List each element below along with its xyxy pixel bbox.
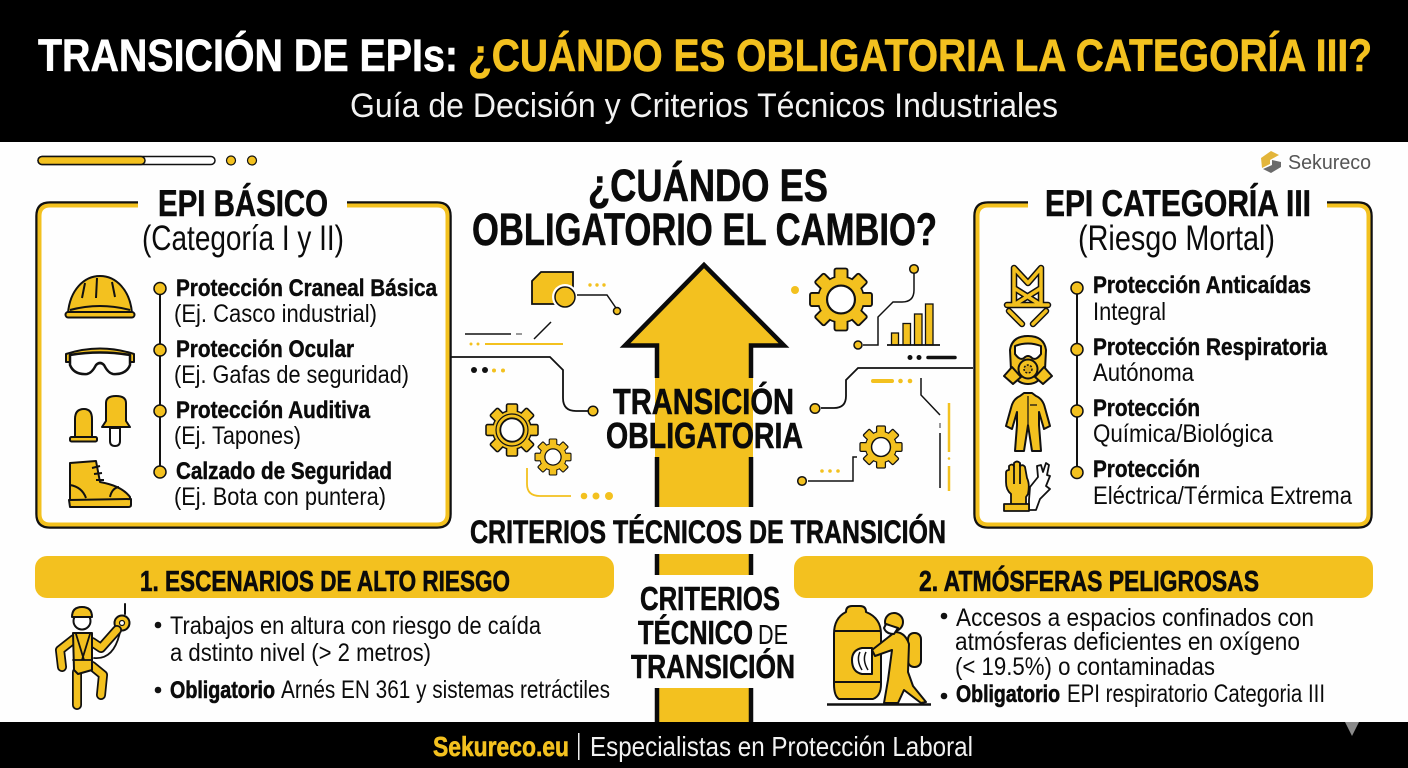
list item 2 [1093,334,1328,387]
list item 2: Protección Respiratoria [1093,334,1328,361]
bullet 1 [941,604,1314,681]
banner [794,556,1373,598]
header band [0,0,1408,142]
list item 1: (Ej. Casco industrial) [174,300,377,328]
list item 3: (Ej. Tapones) [174,422,301,450]
icon: gears left [486,404,571,475]
panel subheading: (Categoría I y II) [142,219,344,258]
banner: 1. ESCENARIOS DE ALTO RIESGO [140,566,510,598]
bullet 2: EPI respiratorio Categoria III [1067,680,1325,708]
icon: harness [1007,268,1048,324]
list item 3: Química/Biológica [1093,420,1273,448]
central label: technical criteria: TRANSICIÓN [631,648,795,685]
bullet 1: a dstinto nivel (> 2 metros) [170,639,431,667]
panel subheading: (Riesgo Mortal) [1078,219,1275,258]
list item 2: Protección Ocular [176,336,354,363]
timeline [154,282,166,478]
circuit: right side with gears and bar chart [791,265,973,491]
footer tagline: Especialistas en Protección Laboral [590,731,973,762]
subtitle: Guía de Decisión y Criterios Técnicos Industriales [350,87,1058,125]
list item 4 [1093,456,1352,510]
footer band [0,722,1408,768]
bullet 1: Accesos a espacios confinados con [956,604,1314,632]
banner [35,556,614,598]
footer brand: Sekureco.eu [433,731,569,762]
list item 4: Calzado de Seguridad [176,458,392,485]
central label: technical criteria: DE [758,619,788,650]
list item 1: Protección Craneal Básica [176,275,438,302]
bullet 2 [155,676,610,704]
bullet 1: Trabajos en altura con riesgo de caída [170,612,541,640]
list item 4 [174,458,392,511]
timeline [1071,282,1083,478]
title [38,30,1372,81]
panel: EPI categoría III [974,183,1372,528]
central question heading [472,160,937,255]
central label: technical criteria [631,580,795,685]
logo: Sekureco: Sekureco [1288,152,1371,174]
list item 2 [174,336,409,389]
list item 4: (Ej. Bota con puntera) [174,483,386,511]
arrow label [606,380,803,456]
list item 1: Protección Anticaídas [1093,272,1311,299]
icon: gas mask [1004,336,1052,384]
banner: 2. ATMÓSFERAS PELIGROSAS [919,564,1259,598]
icon: protective suit [1006,393,1050,451]
icon: helmet [66,276,134,318]
icon: gloves [1004,462,1050,511]
icon: gear bottom right [860,426,902,468]
title: TRANSICIÓN DE EPIs: [38,30,458,81]
arrow: mandatory transition [606,265,803,722]
bullet 1: (< 19.5%) o contaminadas [955,653,1215,681]
bullet 1 [155,612,541,667]
list item 1 [174,275,438,328]
panel: high-risk scenarios [35,556,614,705]
central label: technical criteria: CRITERIOS [640,580,780,617]
list item 1 [1093,272,1311,326]
central question heading: ¿CUÁNDO ES [588,160,828,211]
circuit: left side with document and gears [451,272,620,500]
list item 2: Autónoma [1093,359,1194,387]
list item 2: (Ej. Gafas de seguridad) [174,361,409,389]
list item 3: Protección Auditiva [176,397,371,424]
icon: goggles [66,348,134,374]
panel heading: EPI CATEGORÍA III [1045,183,1311,224]
bar chart icon [887,304,940,345]
icon: gear top right [810,268,872,330]
central question heading: OBLIGATORIO EL CAMBIO? [472,204,937,255]
list item 1: Integral [1093,298,1166,326]
panel: hazardous atmospheres [794,556,1373,708]
arrow label: TRANSICIÓN [613,380,794,422]
marker triangle [1345,722,1359,736]
panel: EPI básico [36,183,450,528]
icon: document with magnifier [532,272,620,314]
list item 4: Protección [1093,456,1200,483]
bullet 2: Obligatorio [170,677,275,704]
heading: technical criteria: CRITERIOS TÉCNICOS DE TRANSICIÓN [470,514,946,550]
bullet 2: Obligatorio [956,681,1060,708]
icon: boot [69,461,131,507]
list item 3 [174,397,371,450]
icon: worker at height [60,604,130,705]
list item 3: Protección [1093,395,1200,422]
icon: earplugs [70,396,130,446]
icon: worker at confined tank [827,606,931,704]
progress decoration [38,156,256,165]
central label: technical criteria: TÉCNICO [638,614,753,651]
arrow label: OBLIGATORIA [606,415,803,456]
list item 3 [1093,395,1273,448]
bullet 2: Arnés EN 361 y sistemas retráctiles [281,676,610,704]
list item 4: Eléctrica/Térmica Extrema [1093,482,1352,510]
bullet 2 [941,680,1325,708]
bullet 1: atmósferas deficientes en oxígeno [955,628,1300,656]
panel heading: EPI BÁSICO [158,183,328,224]
